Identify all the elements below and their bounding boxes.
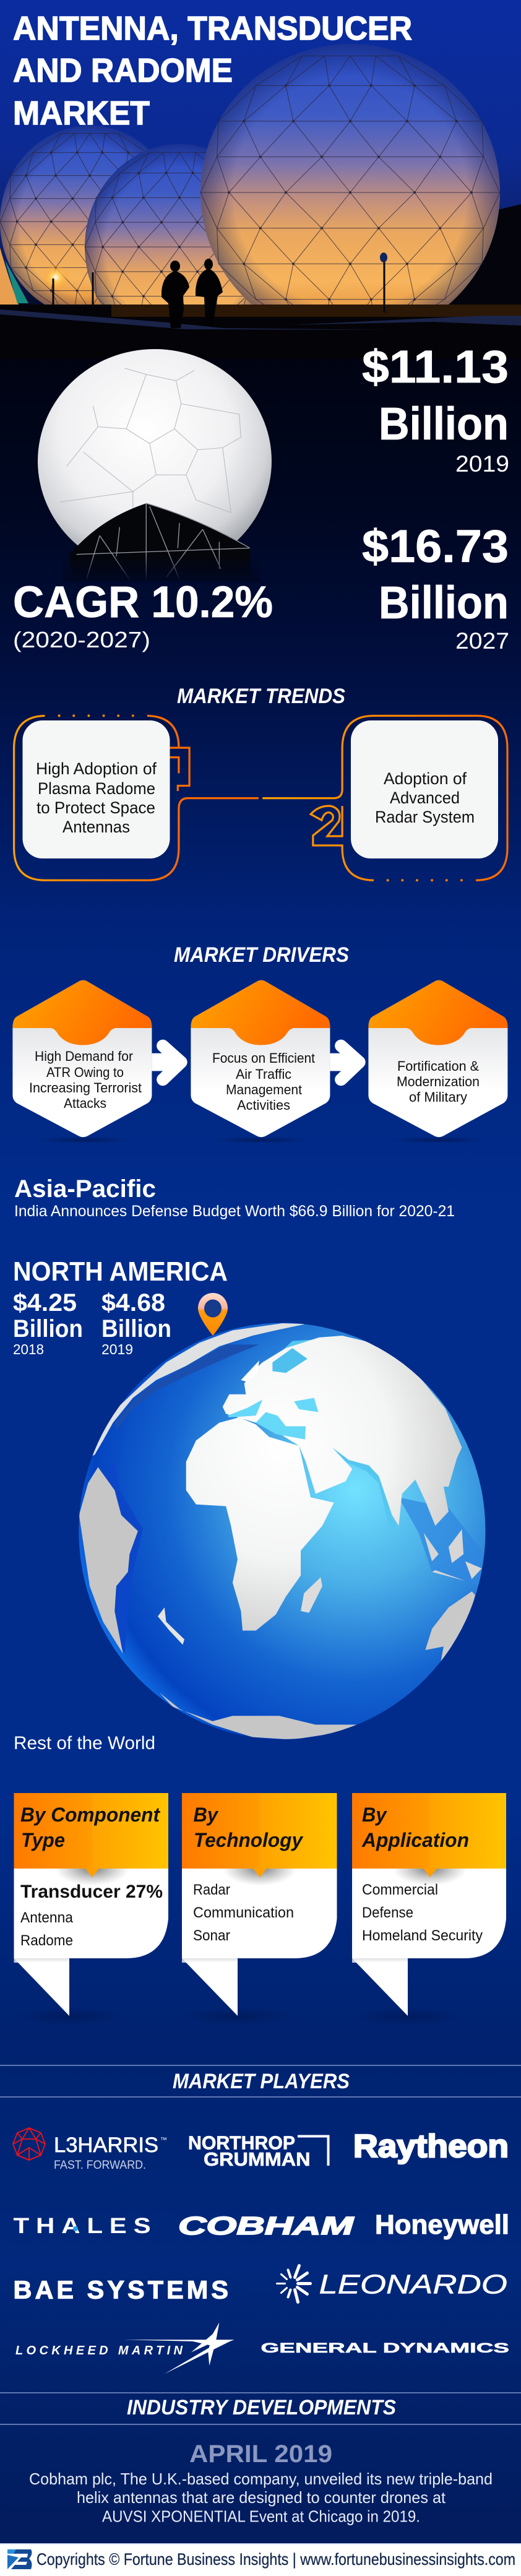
region: North America (13, 1256, 228, 1357)
logo: General Dynamics: GENERAL DYNAMICS (261, 2340, 509, 2356)
left dome (0, 126, 179, 318)
panel: by technology: Sonar (193, 1927, 230, 1944)
panel: by application: Application (361, 1829, 469, 1851)
stat: 2027 market size: Billion (379, 577, 509, 628)
silhouette: person two (196, 259, 223, 326)
panel: by application: Homeland Security (362, 1927, 483, 1944)
region: Asia-Pacific (14, 1175, 455, 1220)
driver two text: Focus on Efficient (212, 1050, 315, 1066)
panel: by component type: Type (21, 1829, 65, 1851)
heading: market trends: MARKET TRENDS (177, 685, 345, 708)
Atlantic rim shadow (114, 1344, 259, 1430)
heading: market players: MARKET PLAYERS (173, 2070, 350, 2093)
logo: Honeywell: Honeywell (375, 2210, 509, 2240)
Baltic (272, 1348, 308, 1373)
Mediterranean and Black Sea (228, 1398, 318, 1440)
lit verge (111, 305, 521, 317)
North America and Greenland rim (88, 1323, 306, 1458)
logo: Northrop Grumman: NORTHROP (188, 2132, 295, 2154)
driver one text (29, 1048, 142, 1111)
driver three hexagon (368, 980, 507, 1144)
title: MARKET (13, 95, 150, 132)
region: Asia-Pacific: Asia-Pacific (14, 1175, 156, 1203)
North America 2018 value (13, 1289, 83, 1357)
logo: L3Harris: ™ (160, 2137, 167, 2144)
radome sphere (38, 349, 272, 573)
logo: L3Harris (13, 2128, 167, 2172)
lamp head (380, 253, 387, 262)
logo: Leonardo: LEONARDO (319, 2269, 507, 2300)
North America 2019 value (101, 1289, 171, 1357)
trend card one: Plasma Radome (38, 779, 155, 798)
middle dome (85, 144, 274, 350)
logo: Thales: THALES (14, 2214, 158, 2238)
North America 2019 value: Billion (101, 1315, 171, 1342)
stat: CAGR (13, 578, 273, 652)
Southeast Asia islands (424, 1529, 482, 1581)
globe (79, 1323, 486, 1740)
Arctic and Asian shelves (283, 1339, 394, 1525)
logo: Northrop Grumman (188, 2132, 328, 2170)
panel: by technology: Radar (193, 1882, 230, 1898)
lamp glow (42, 264, 69, 291)
driver three text: Modernization (397, 1074, 480, 1089)
trend card one (22, 720, 170, 858)
panel: market trends (14, 715, 507, 880)
panel: by application: Defense (362, 1904, 413, 1921)
truss tower (70, 503, 251, 579)
panel: by component type: Antenna (20, 1909, 74, 1926)
Australia (425, 1591, 475, 1664)
fade under tower (62, 554, 260, 582)
stat: 2027 market size (362, 521, 509, 654)
logo: Leonardo (277, 2265, 507, 2302)
stat: CAGR: (2020-2027) (13, 627, 150, 652)
silhouette: person one (161, 261, 189, 328)
Antarctica (160, 1693, 357, 1740)
orange outline and numeral 1 (14, 715, 259, 880)
North America 2018 value: $4.25 (13, 1289, 77, 1316)
orange outline and numeral 2 (262, 715, 507, 880)
arrow two (330, 1046, 360, 1079)
stat: CAGR: CAGR 10.2% (13, 578, 273, 627)
stat: 2019 market size: $11.13 (362, 341, 509, 392)
logo: L3Harris: L3HARRIS (54, 2133, 158, 2157)
shallow seas (398, 1497, 482, 1586)
British Isles (241, 1360, 259, 1382)
trend card two: Advanced (390, 789, 460, 807)
teal tent accent (5, 260, 28, 303)
driver one text: ATR Owing to (46, 1065, 124, 1080)
panel: by application: Commercial (362, 1882, 438, 1898)
hero photo: radome domes at dusk (0, 44, 521, 359)
text block: April 2019 development: Cobham plc, The U.K.-based company, unveiled its new triple-band (29, 2470, 493, 2488)
stat: 2019 market size: 2019 (455, 451, 509, 477)
icon: Fortune Business Insights mark (7, 2549, 32, 2569)
arrow one (152, 1046, 181, 1079)
North America 2018 value: Billion (13, 1315, 83, 1342)
logo: Northrop Grumman: GRUMMAN (204, 2148, 311, 2170)
region: North America: NORTH AMERICA (13, 1256, 228, 1287)
footer (0, 2543, 521, 2576)
stat: 2019 market size: Billion (379, 398, 509, 449)
trend card two: Adoption of (384, 769, 467, 788)
logo: Cobham: COBHAM (178, 2211, 354, 2240)
driver two hexagon (191, 980, 330, 1144)
icon: location pin (198, 1293, 228, 1336)
panel: by application: By (362, 1804, 388, 1826)
North America 2018 value: 2018 (13, 1341, 44, 1357)
ground (0, 305, 521, 359)
title (13, 10, 412, 132)
trend card two (351, 720, 498, 858)
text block: April 2019 development: APRIL 2019 (189, 2440, 332, 2468)
island arc (158, 1607, 184, 1645)
far dome sliver (0, 248, 19, 305)
panel: by application (352, 1793, 506, 2025)
driver two text: Management (226, 1082, 302, 1097)
driver one hexagon (12, 980, 152, 1144)
driver two text: Activities (237, 1097, 290, 1113)
lamp posts (53, 259, 384, 313)
logo: Lockheed Martin (15, 2322, 235, 2374)
heading: industry developments: INDUSTRY DEVELOPMENTS (127, 2396, 396, 2419)
trend card one: to Protect Space (37, 798, 155, 817)
panel: by component type: Transducer 27% (20, 1882, 163, 1902)
driver three text (397, 1058, 480, 1105)
driver three text: Fortification & (397, 1058, 479, 1074)
logo: L3Harris: FAST. FORWARD. (54, 2159, 146, 2172)
Eurasia (223, 1336, 462, 1526)
trend card two: Radar System (375, 808, 475, 826)
label: rest of the world: Rest of the World (14, 1733, 155, 1753)
North America 2019 value: $4.68 (101, 1289, 165, 1316)
panel: by component type (14, 1793, 168, 2025)
stat: 2027 market size: 2027 (455, 628, 509, 654)
trend card one: Antennas (62, 818, 130, 836)
driver one text: High Demand for (35, 1048, 133, 1064)
South America shelf shadow (115, 1471, 143, 1654)
panel: by technology: Technology (194, 1829, 304, 1851)
Madagascar (301, 1577, 322, 1613)
driver one text: Attacks (64, 1096, 106, 1111)
heading: market drivers: MARKET DRIVERS (174, 943, 349, 967)
title: AND RADOME (13, 52, 233, 89)
panel: market drivers (12, 980, 507, 1144)
logo: Lockheed Martin: LOCKHEED MARTIN (15, 2344, 183, 2358)
title: ANTENNA, TRANSDUCER (13, 10, 412, 47)
region: Asia-Pacific: India Announces Defense Budget Worth $66.9 Billion for 2020-21 (14, 1203, 455, 1220)
stat: 2019 market size (362, 341, 509, 477)
text block: April 2019 development: helix antennas that are designed to counter drones at (77, 2488, 446, 2507)
radome panel seams (60, 368, 241, 514)
panel: by technology (182, 1793, 337, 2025)
driver two text: Air Traffic (236, 1066, 291, 1082)
panel: market player logos (13, 2128, 509, 2374)
white radome photo (38, 349, 272, 582)
logo: BAE Systems: BAE SYSTEMS (14, 2275, 231, 2304)
text block: April 2019 development (29, 2440, 493, 2525)
text block: April 2019 development: AUVSI XPONENTIAL Event at Chicago in 2019. (102, 2507, 420, 2525)
panel: by component type: By Component (20, 1804, 160, 1826)
panel: by component type: Radome (20, 1932, 73, 1949)
South America (79, 1467, 138, 1654)
Africa (186, 1417, 334, 1630)
driver three text: of Military (409, 1089, 467, 1105)
large dome (200, 44, 500, 341)
stat: 2027 market size: $16.73 (362, 521, 509, 572)
wet road (0, 309, 521, 330)
panel: by technology: Communication (193, 1904, 294, 1921)
tree line (433, 204, 521, 306)
North America 2019 value: 2019 (101, 1341, 133, 1357)
driver one text: Increasing Terrorist (29, 1080, 142, 1096)
driver two text (212, 1050, 315, 1113)
logo: Raytheon: Raytheon (353, 2129, 509, 2164)
trend card one: High Adoption of (36, 759, 157, 778)
panel: by technology: By (193, 1804, 219, 1826)
